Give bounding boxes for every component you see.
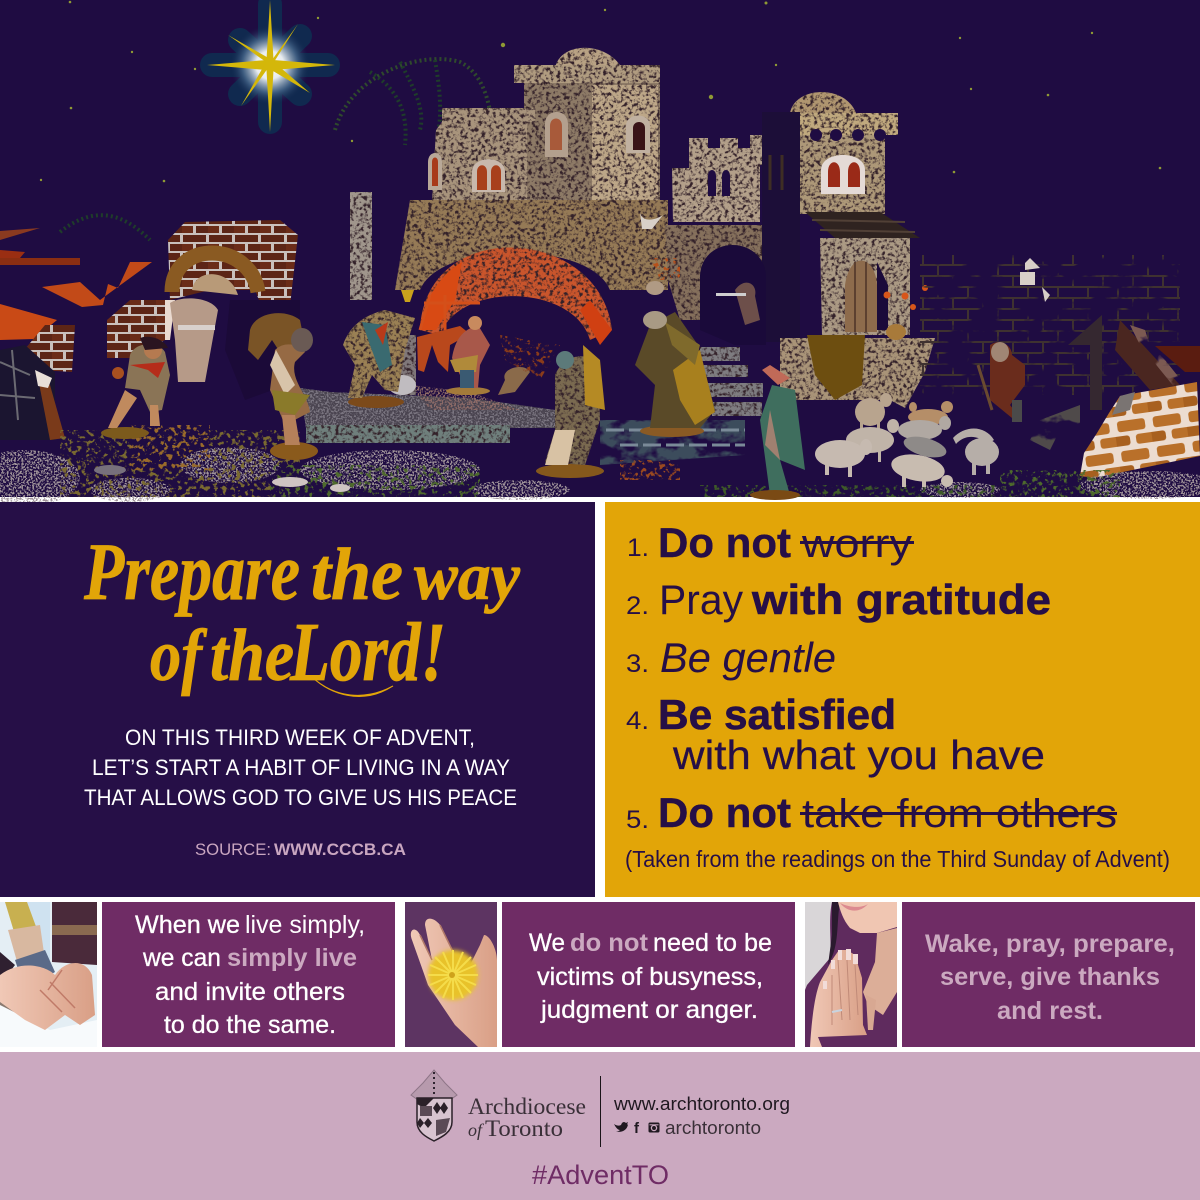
panel: five steps list on gold xyxy=(605,502,1200,897)
title: Prepare the way of the Lord: Prepare xyxy=(83,526,300,617)
dark openings xyxy=(700,245,766,345)
panel: title and intro on dark purple xyxy=(0,502,595,897)
list item 2: Pray xyxy=(659,576,743,623)
main stone building with domes and towers xyxy=(350,48,935,416)
archdiocese wordmark: of xyxy=(468,1120,485,1140)
woman with red scarf xyxy=(101,427,149,439)
list item 4: 4. xyxy=(626,707,649,735)
panel: busyness: do not xyxy=(570,929,649,957)
panel: wake pray prepare: and rest. xyxy=(997,997,1103,1025)
title: Prepare the way of the Lord: way xyxy=(414,538,521,614)
intro text: LET’S START A HABIT OF LIVING IN A WAY xyxy=(92,755,510,780)
archdiocese wordmark xyxy=(468,1094,586,1141)
title: Prepare the way of the Lord: the xyxy=(311,534,403,616)
column xyxy=(401,335,416,395)
standing sheep xyxy=(898,416,951,440)
icon: twitter xyxy=(614,1122,628,1132)
panel: nativity scene photo xyxy=(0,0,1200,506)
source note: (Taken from the readings on the Third Sunday of Advent) xyxy=(625,846,1170,872)
ruined wall on the right xyxy=(920,255,1200,410)
panel: wake pray prepare xyxy=(902,902,1195,1047)
white dove xyxy=(640,212,663,229)
brick arch wall left xyxy=(0,220,300,440)
figure in green cloak xyxy=(762,365,790,385)
tiled roof xyxy=(805,212,920,238)
dark tower xyxy=(762,112,800,342)
hashtag: #AdventTO xyxy=(532,1160,669,1190)
website: www.archtoronto.org xyxy=(613,1094,790,1114)
dark palm silhouette xyxy=(225,300,300,400)
flute player xyxy=(735,283,760,325)
icon: instagram xyxy=(648,1122,660,1132)
arcade notches xyxy=(810,129,886,141)
panel: live simply: When we xyxy=(135,911,240,939)
list item 5: 5. xyxy=(626,806,649,834)
ledge with moss xyxy=(780,338,935,408)
intro text: THAT ALLOWS GOD TO GIVE US HIS PEACE xyxy=(84,785,517,810)
panel: wake pray prepare: serve, give thanks xyxy=(940,963,1160,991)
icon: small stars in the sky xyxy=(40,1,1161,182)
panel: busyness: victims of busyness, xyxy=(537,963,763,991)
panel: busyness: need to be xyxy=(653,929,772,957)
title: Prepare the way of the Lord xyxy=(83,526,521,699)
fern fronds above the building xyxy=(60,59,491,240)
photo: woman with praying hands xyxy=(805,902,897,1047)
list item 1: worry xyxy=(801,522,912,566)
panel: live simply: simply live xyxy=(227,944,357,972)
panel: busyness xyxy=(502,902,795,1047)
list item 4: Be satisfied xyxy=(658,691,896,738)
figures at the manger xyxy=(101,281,1025,500)
icon: star of Bethlehem xyxy=(207,0,335,132)
list item 4 xyxy=(626,691,1045,778)
source line: SOURCE: xyxy=(195,840,271,859)
list item 1: 1. xyxy=(627,534,649,562)
panel: busyness: judgment or anger. xyxy=(540,996,758,1024)
list item 5: Do not xyxy=(658,789,791,836)
central glowing arch xyxy=(420,247,612,340)
wooden door xyxy=(845,261,877,332)
title: Prepare the way of the Lord: Lord! xyxy=(289,606,446,699)
icon: facebook: f xyxy=(634,1120,640,1137)
handle: archtoronto xyxy=(665,1118,761,1138)
orange distant roofs at left xyxy=(0,228,152,340)
steps xyxy=(700,347,763,416)
child and Joseph xyxy=(498,367,530,395)
wise man in gold xyxy=(640,425,704,437)
footer band xyxy=(0,1052,1200,1200)
panel: live simply: and invite others xyxy=(155,978,345,1006)
stone platform xyxy=(300,385,745,465)
archdiocese wordmark: Archdiocese xyxy=(468,1094,586,1119)
title: Prepare the way of the Lord: of xyxy=(150,615,207,697)
panel: live simply: we can xyxy=(142,944,221,972)
windows xyxy=(428,112,865,196)
ground with stones and moss xyxy=(0,425,1200,506)
panel: live simply xyxy=(102,902,395,1047)
icon: archdiocese coat of arms xyxy=(411,1070,457,1141)
list item 4: with what you have xyxy=(672,732,1045,778)
resting tan sheep xyxy=(908,401,953,425)
list item 1 xyxy=(627,519,914,566)
panel: live simply: live simply, xyxy=(245,911,365,939)
list item 3: 3. xyxy=(626,650,649,678)
list item 1: Do not xyxy=(658,519,791,566)
archdiocese wordmark: Toronto xyxy=(485,1116,563,1141)
intro text: ON THIS THIRD WEEK OF ADVENT, xyxy=(125,725,475,750)
shepherd with curved cloth xyxy=(270,442,318,460)
Mary xyxy=(446,387,490,395)
source line: WWW.CCCB.CA xyxy=(274,840,406,859)
list item 2: with gratitude xyxy=(751,576,1051,623)
list item 2 xyxy=(626,576,1051,623)
panel: live simply: to do the same. xyxy=(164,1011,336,1039)
orange foliage xyxy=(650,258,680,280)
flock of sheep xyxy=(815,393,1080,487)
list item 5 xyxy=(626,789,1117,836)
goblet xyxy=(401,290,414,302)
intro text xyxy=(84,725,517,810)
panel: busyness: We xyxy=(529,929,565,957)
panel: wake pray prepare: Wake, pray, prepare, xyxy=(925,930,1175,958)
list item 2: 2. xyxy=(626,592,649,620)
title: Prepare the way of the Lord: the xyxy=(210,615,294,697)
ox xyxy=(417,326,470,372)
old man shepherd xyxy=(990,342,1025,420)
photo: holding hands in snow xyxy=(0,902,97,1030)
list item 5: take from others xyxy=(802,792,1117,836)
kneeling shepherd xyxy=(348,396,404,408)
photo: hand holding dandelion xyxy=(405,902,497,1047)
source line xyxy=(195,840,406,859)
orange and white brick ruin xyxy=(1080,382,1200,478)
goat xyxy=(855,393,892,431)
list item 3: Be gentle xyxy=(660,634,836,681)
central shepherd xyxy=(536,464,604,478)
